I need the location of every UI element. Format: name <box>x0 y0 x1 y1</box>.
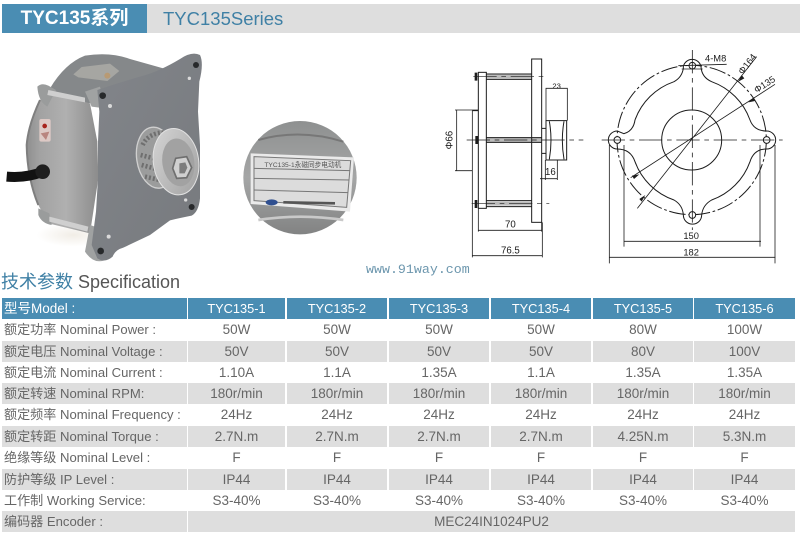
row: voltage <box>2 341 795 362</box>
row: encoder: 编码器 Encoder : <box>4 514 103 529</box>
row: power: 80W <box>629 322 657 337</box>
front view dimensions <box>609 52 777 258</box>
row: power: 50W <box>527 322 555 337</box>
table header: TYC135-6 <box>715 301 774 316</box>
row: power: 50W <box>425 322 453 337</box>
row: frequency: 24Hz <box>321 407 353 422</box>
front plate corner lugs <box>85 87 110 261</box>
row: rpm: 180r/min <box>515 386 567 401</box>
nameplate logo <box>266 199 278 205</box>
row: IP level: IP44 <box>223 472 250 487</box>
row: rpm: 180r/min <box>617 386 669 401</box>
motor body <box>27 92 98 233</box>
watermark: www.91way.com <box>366 262 470 277</box>
title banner <box>2 4 800 33</box>
row: voltage: 额定电压 Nominal Voltage : <box>4 344 163 359</box>
row: IP level: 防护等级 IP Level : <box>4 472 114 487</box>
motor nameplate <box>73 64 119 81</box>
row: voltage: 80V <box>631 344 655 359</box>
front view dimensions: Φ135 <box>752 74 777 95</box>
row: level: F <box>537 450 545 465</box>
row: rpm <box>2 383 795 404</box>
pulley profile <box>542 121 567 160</box>
row: IP level <box>2 469 795 490</box>
row: working service: 工作制 Working Service: <box>4 493 146 508</box>
ground shadow <box>37 223 110 247</box>
row: level: F <box>232 450 241 465</box>
row: working service <box>4 493 769 508</box>
row: torque: 2.7N.m <box>215 429 258 444</box>
row: voltage: 50V <box>427 344 451 359</box>
row: torque: 2.7N.m <box>315 429 359 444</box>
housing disc <box>243 121 357 234</box>
table header <box>2 298 795 319</box>
row: torque <box>2 426 795 447</box>
row: level: F <box>740 450 749 465</box>
row: IP level: IP44 <box>527 472 555 487</box>
row: level: F <box>639 450 647 465</box>
row: power: 100W <box>727 322 762 337</box>
toothed wheel <box>133 125 179 191</box>
row: working service: S3-40% <box>720 493 769 508</box>
title: Chinese series name: TYC135系列 <box>21 8 128 29</box>
mounting holes <box>97 62 199 254</box>
table header: TYC135-4 <box>512 301 570 316</box>
row: working service: S3-40% <box>619 493 667 508</box>
front view dimensions: 182 <box>683 248 699 258</box>
dimension extension lines <box>609 145 775 263</box>
row: frequency <box>4 407 760 422</box>
bolt bars <box>47 90 88 232</box>
center lines <box>602 50 783 230</box>
row: encoder <box>2 511 795 532</box>
row: torque: 5.3N.m <box>723 429 766 444</box>
row: torque: 额定转距 Nominal Torque : <box>4 429 159 444</box>
row: frequency: 额定频率 Nominal Frequency : <box>4 407 181 422</box>
side view <box>445 59 583 257</box>
row: level: F <box>333 450 341 465</box>
row: voltage: 50V <box>224 344 249 359</box>
dimension labels <box>445 81 561 256</box>
dimension labels: 70 <box>505 220 516 231</box>
row: rpm: 额定转速 Nominal RPM: <box>4 386 144 401</box>
title: English series name: TYC135Series <box>163 8 283 29</box>
row: current: 1.35A <box>727 365 762 380</box>
row: frequency: 24Hz <box>525 407 557 422</box>
row: rpm: 180r/min <box>210 386 263 401</box>
dimension lines <box>455 88 567 257</box>
title: Chinese series name <box>2 4 147 33</box>
bolt shanks <box>486 77 542 204</box>
row: current: 1.35A <box>421 365 457 380</box>
row: frequency: 24Hz <box>729 407 760 422</box>
motor rim <box>27 100 40 205</box>
row: torque: 4.25N.m <box>617 429 669 444</box>
photo: motor <box>6 54 202 262</box>
table header: TYC135-1 <box>207 301 266 316</box>
dimension labels: 16 <box>545 167 556 178</box>
row: current: 1.1A <box>323 365 351 380</box>
hub <box>173 157 192 178</box>
front view dimensions: 150 <box>683 231 699 241</box>
row: frequency: 24Hz <box>423 407 455 422</box>
row: working service: S3-40% <box>517 493 565 508</box>
dimension labels: 23 <box>552 81 561 90</box>
row: rpm: 180r/min <box>413 386 465 401</box>
row: current: 1.35A <box>625 365 661 380</box>
nameplate text: TYC135-1永磁同步电动机 <box>264 160 342 169</box>
table header: TYC135-3 <box>410 301 468 316</box>
motor top <box>50 54 163 103</box>
row: IP level: IP44 <box>425 472 453 487</box>
small holes <box>107 77 191 239</box>
row: level: 绝缘等级 Nominal Level : <box>4 450 150 465</box>
row: frequency: 24Hz <box>627 407 659 422</box>
row: working service: S3-40% <box>212 493 261 508</box>
row: rpm: 180r/min <box>718 386 771 401</box>
technical drawings <box>445 50 783 264</box>
pulley <box>133 125 203 198</box>
table header: TYC135-5 <box>614 301 672 316</box>
row: current <box>4 365 762 380</box>
row: frequency: 24Hz <box>221 407 252 422</box>
dimension labels: 76.5 <box>501 245 520 256</box>
row: torque: 2.7N.m <box>417 429 461 444</box>
row: power <box>4 322 762 337</box>
row: IP level: IP44 <box>731 472 758 487</box>
front plate <box>92 54 202 260</box>
row: level: F <box>435 450 443 465</box>
section heading: 技术参数 Specification <box>1 272 180 292</box>
table header: TYC135-2 <box>308 301 366 316</box>
row: working service: S3-40% <box>415 493 463 508</box>
table header: 型号Model : <box>4 301 75 316</box>
leader lines <box>631 57 775 208</box>
row: power: 50W <box>323 322 351 337</box>
row: voltage: 50V <box>325 344 349 359</box>
row: torque: 2.7N.m <box>519 429 563 444</box>
nameplate <box>251 153 354 212</box>
row: current: 1.10A <box>219 365 254 380</box>
row: working service: S3-40% <box>313 493 361 508</box>
row: current: 额定电流 Nominal Current : <box>4 365 163 380</box>
row: IP level: IP44 <box>323 472 351 487</box>
front view <box>602 50 783 263</box>
front view dimensions: 4-M8 <box>705 54 726 64</box>
row: voltage: 50V <box>529 344 553 359</box>
row: current: 1.1A <box>527 365 555 380</box>
cable <box>7 172 43 177</box>
row: power: 额定功率 Nominal Power : <box>4 322 156 337</box>
row: IP level: IP44 <box>629 472 657 487</box>
row: level <box>4 450 749 465</box>
photo: nameplate close-up <box>243 121 357 234</box>
row: voltage: 100V <box>729 344 760 359</box>
dimension labels: Φ66 <box>445 131 456 149</box>
front view dimensions: Φ164 <box>736 52 758 76</box>
row: encoder: MEC24IN1024PU2 <box>434 514 549 529</box>
row: power: 50W <box>223 322 250 337</box>
row: rpm: 180r/min <box>311 386 363 401</box>
arrowheads <box>632 75 755 202</box>
rear flange ears <box>37 84 56 225</box>
flange disc <box>149 126 203 198</box>
warning label <box>39 119 51 142</box>
